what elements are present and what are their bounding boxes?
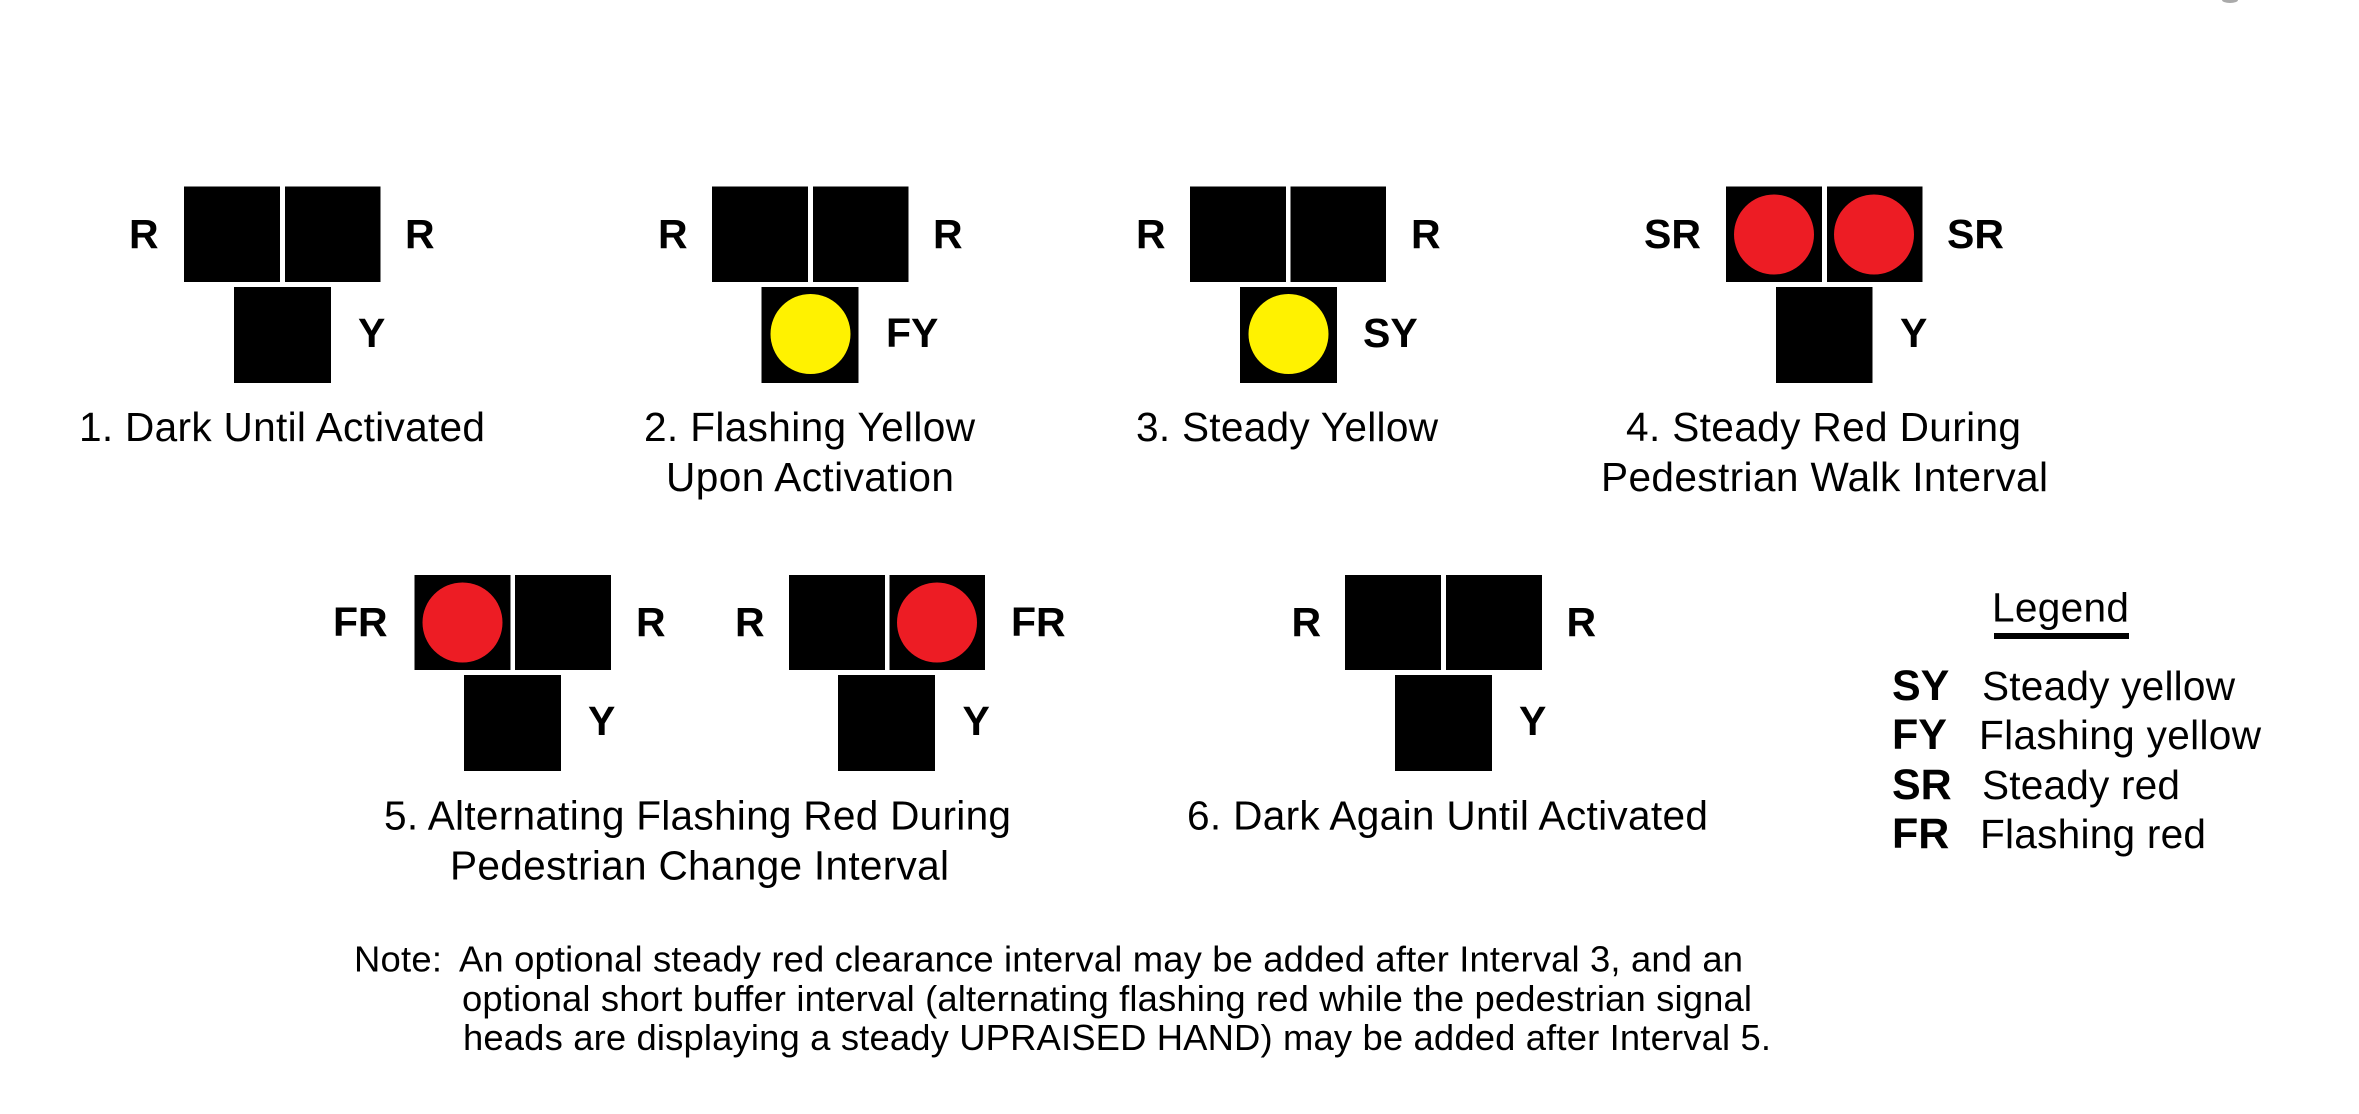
signal head 5 left flash	[414, 575, 611, 771]
legend row SY: Steady yellow	[1982, 663, 2236, 709]
caption 2: 2. Flashing Yellow	[644, 404, 976, 450]
caption 3: 3. Steady Yellow	[1136, 404, 1439, 450]
signal labels 4: SR	[1644, 211, 1701, 257]
legend row FY: Flashing yellow	[1979, 712, 2262, 758]
signal labels 4	[1644, 211, 2004, 356]
signal labels 4: SR	[1947, 211, 2004, 257]
caption 6: 6. Dark Again Until Activated	[1187, 792, 1708, 838]
signal labels 6: R	[1566, 599, 1596, 645]
legend heading: Legend	[1992, 584, 2129, 630]
legend row FR: Flashing red	[1980, 811, 2206, 857]
caption 1: 1. Dark Until Activated	[79, 404, 485, 450]
signal labels 1: R	[129, 211, 159, 257]
panel: interval 4 steady red during pedestrian walk	[1601, 186, 2048, 500]
signal head 1	[184, 186, 380, 383]
panel: interval 3 steady yellow	[1136, 186, 1441, 450]
signal labels 5 right flash: R	[735, 599, 765, 645]
signal labels 5 left flash: R	[636, 599, 666, 645]
note: optional short buffer interval (alternating flashing red while the pedestrian signal	[462, 978, 1752, 1019]
signal labels 5 left flash	[333, 599, 666, 744]
caption 4: Pedestrian Walk Interval	[1601, 454, 2048, 500]
signal labels 5 right flash	[735, 599, 1066, 744]
note	[354, 938, 1771, 1058]
panel: interval 6 dark again until activated	[1187, 575, 1708, 838]
signal labels 6: Y	[1519, 698, 1546, 744]
signal head 3	[1190, 186, 1386, 383]
signal head 2	[712, 186, 908, 383]
caption 5: 5. Alternating Flashing Red During	[384, 792, 1011, 838]
panel: interval 5 alternating flashing red	[333, 575, 1066, 888]
signal head 5 right flash	[789, 575, 985, 771]
signal labels 2: FY	[886, 310, 938, 356]
signal labels 5 right flash: Y	[962, 698, 990, 744]
note: Note:	[354, 938, 442, 980]
legend row SR: Steady red	[1982, 762, 2180, 808]
caption 2	[644, 404, 976, 500]
signal labels 2: R	[658, 211, 688, 257]
caption 5: Pedestrian Change Interval	[450, 842, 949, 888]
legend row SR	[1892, 761, 2180, 809]
legend	[1892, 584, 2262, 858]
signal labels 4: Y	[1900, 310, 1927, 356]
signal head 6	[1345, 575, 1542, 771]
signal labels 1: R	[405, 211, 435, 257]
note: heads are displaying a steady UPRAISED HAND) may be added after Interval 5.	[463, 1017, 1771, 1058]
caption 4: 4. Steady Red During	[1626, 404, 2021, 450]
signal labels 5 left flash: Y	[588, 698, 615, 744]
signal labels 3: SY	[1363, 310, 1418, 356]
signal labels 3: R	[1136, 211, 1166, 257]
signal labels 6	[1292, 599, 1596, 744]
panel: interval 2 flashing yellow upon activation	[644, 186, 976, 500]
signal labels 2: R	[933, 211, 963, 257]
signal labels 6: R	[1292, 599, 1321, 645]
signal labels 3: R	[1411, 211, 1441, 257]
panel: interval 1 dark until activated	[79, 186, 485, 450]
note: An optional steady red clearance interval may be added after Interval 3, and an	[459, 938, 1743, 980]
caption 5	[384, 792, 1011, 888]
legend row FY: FY	[1892, 711, 1947, 759]
legend row SY: SY	[1892, 662, 1949, 710]
legend row FR: FR	[1892, 810, 1949, 858]
legend row SR: SR	[1892, 761, 1952, 809]
caption 4	[1601, 404, 2048, 500]
signal labels 5 right flash: FR	[1011, 599, 1066, 645]
signal labels 3	[1136, 211, 1441, 356]
signal labels 1: Y	[358, 310, 385, 356]
signal labels 2	[658, 211, 963, 356]
signal labels 5 left flash: FR	[333, 599, 388, 645]
signal head 4	[1726, 186, 1922, 383]
signal labels 1	[129, 211, 435, 356]
caption 2: Upon Activation	[666, 454, 954, 500]
legend row FR	[1892, 810, 2206, 858]
